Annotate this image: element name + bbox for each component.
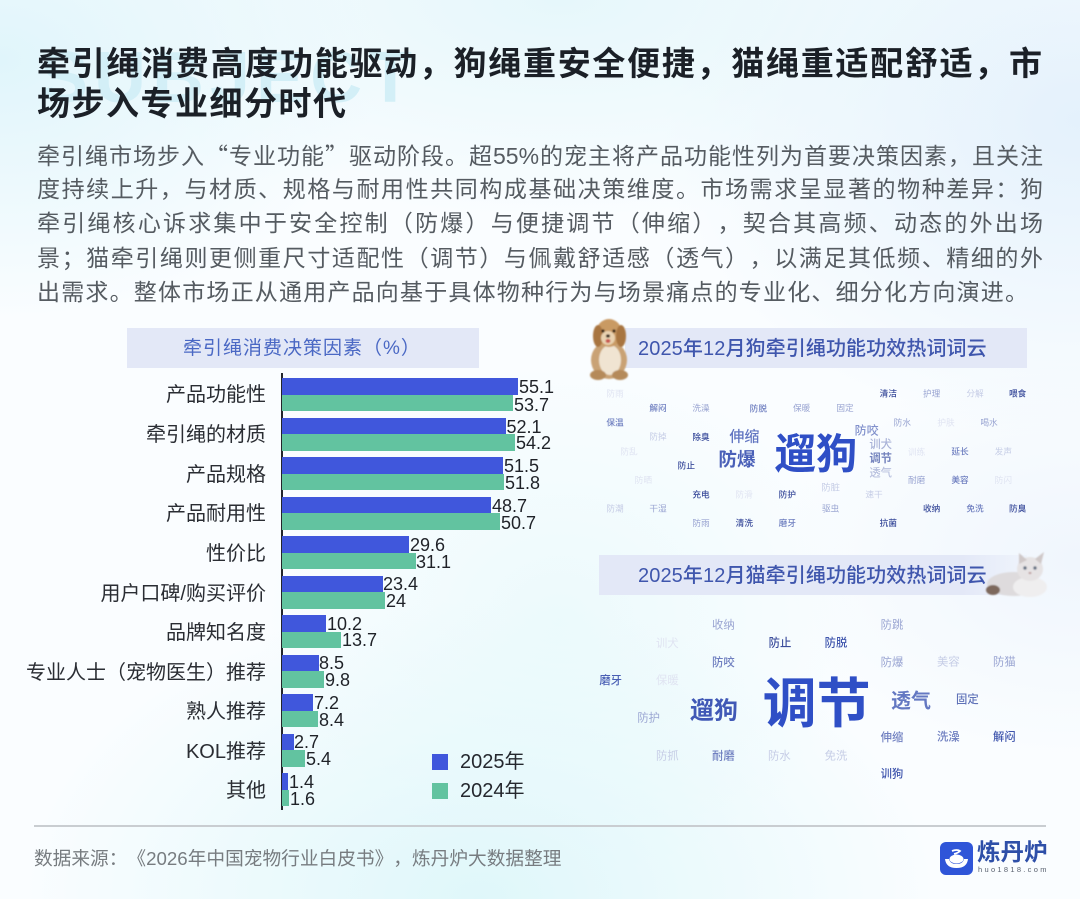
word cloud: dog: 防脱 <box>750 402 767 413</box>
bar chart: 牵引绳的材质 <box>146 424 266 446</box>
word cloud: dog: 速干 <box>865 489 883 499</box>
word cloud: dog: 防止 <box>678 459 695 470</box>
word cloud: dog: 防滑 <box>735 488 753 499</box>
bar chart: 52.1 <box>506 417 542 437</box>
word cloud: dog: 防臭 <box>1009 503 1027 514</box>
word cloud: cat: 训狗 <box>881 768 903 781</box>
title: 牵引绳消费高度功能驱动，狗绳重安全便捷，猫绳重适配舒适，市 <box>37 45 1042 82</box>
bar chart: 29.6 <box>410 535 445 555</box>
word cloud: dog: 固定 <box>836 402 854 413</box>
word cloud: cat: 伸缩 <box>881 730 903 744</box>
word cloud: cat: 保暖 <box>656 673 679 687</box>
word cloud: dog: 防水 <box>894 416 911 427</box>
bar chart: 48.7 <box>492 496 527 516</box>
cat cloud heading: 2025年12月猫牵引绳功能功效热词词云 <box>638 565 987 587</box>
word cloud: cat: 防止 <box>769 636 791 650</box>
legend: 2025年 <box>460 751 524 773</box>
word cloud: dog: 调节 <box>869 451 892 465</box>
icon: dog <box>589 318 629 381</box>
bar chart: 9.8 <box>325 670 350 690</box>
word cloud: cat: 固定 <box>956 692 979 706</box>
word cloud: dog: 洗澡 <box>692 402 710 413</box>
word cloud: cat: 收纳 <box>712 617 735 631</box>
bar chart: 其他 <box>226 780 266 802</box>
word cloud: dog: 充电 <box>692 488 710 499</box>
word cloud: dog: 喝水 <box>980 416 998 427</box>
word cloud: cat: 防护 <box>637 711 660 725</box>
word cloud: dog: 保温 <box>606 416 624 427</box>
word cloud: dog: 免洗 <box>966 503 984 514</box>
bar chart: 51.8 <box>505 473 540 493</box>
watermark: SUBJECT <box>40 38 418 118</box>
word cloud: dog: 喂食 <box>1009 387 1027 398</box>
word cloud: dog: 干湿 <box>649 504 667 514</box>
word cloud: dog: 美容 <box>951 474 969 485</box>
word cloud: cat <box>599 617 1016 781</box>
word cloud: dog: 防护 <box>779 488 796 499</box>
word cloud: cat: 磨牙 <box>599 673 622 687</box>
word cloud: dog: 保暖 <box>793 402 811 413</box>
word cloud: cat: 透气 <box>891 689 931 712</box>
word cloud: dog: 清洗 <box>736 517 753 528</box>
word cloud: dog: 分解 <box>966 387 984 398</box>
bar chart: 品牌知名度 <box>166 622 266 644</box>
logo: huo1818.com <box>978 865 1049 874</box>
word cloud: dog: 防晒 <box>635 474 652 485</box>
word cloud: cat: 免洗 <box>825 749 848 763</box>
bar chart: 13.7 <box>342 630 377 650</box>
word cloud: cat: 解闷 <box>993 730 1016 744</box>
word cloud: cat: 洗澡 <box>937 730 960 744</box>
chart heading <box>127 328 479 368</box>
title <box>37 45 1042 122</box>
word cloud: dog: 透气 <box>869 465 892 479</box>
word cloud: dog: 抗菌 <box>880 517 897 528</box>
bar chart: 产品规格 <box>186 464 266 486</box>
bar chart: 7.2 <box>314 693 339 713</box>
word cloud: dog: 磨牙 <box>779 517 796 528</box>
word cloud: dog: 护理 <box>923 387 941 398</box>
bar chart: 2.7 <box>294 732 319 752</box>
chart heading: 牵引绳消费决策因素（%） <box>183 338 421 359</box>
word cloud: dog: 驱虫 <box>822 503 840 514</box>
word cloud: cat: 防爆 <box>881 655 904 669</box>
word cloud: dog: 防乱 <box>620 445 638 456</box>
word cloud: dog: 防咬 <box>855 422 879 437</box>
word cloud: dog: 耐磨 <box>908 474 926 485</box>
intro paragraph: 出需求。整体市场正从通用产品向基于具体物种行为与场景痛点的专业化、细分化方向演进。 <box>37 279 1029 305</box>
bar chart: 31.1 <box>416 552 451 572</box>
bar chart: 产品功能性 <box>166 384 266 406</box>
word cloud: dog: 防雨 <box>606 387 624 398</box>
word cloud: dog: 防雨 <box>692 517 710 528</box>
word cloud: cat: 防脱 <box>825 636 848 650</box>
bar chart: 5.4 <box>306 749 331 769</box>
bar chart: 54.2 <box>516 433 551 453</box>
bar chart: 53.7 <box>514 395 549 415</box>
word cloud: dog: 解闷 <box>649 402 667 413</box>
word cloud: dog: 防闪 <box>995 474 1012 485</box>
word cloud: cat: 美容 <box>937 655 960 669</box>
word cloud: dog: 训犬 <box>869 437 892 451</box>
bar chart: 51.5 <box>504 456 539 476</box>
word cloud: cat: 训犬 <box>656 636 679 650</box>
bar chart <box>26 373 554 810</box>
word cloud: dog: 伸缩 <box>729 428 759 445</box>
word cloud: cat: 遛狗 <box>690 697 738 724</box>
word cloud: dog: 遛狗 <box>775 431 857 477</box>
dog cloud heading <box>625 328 1027 368</box>
intro paragraph: 景；猫牵引绳则更侧重尺寸适配性（调节）与佩戴舒适感（透气），以满足其低频、精细的外 <box>37 245 1043 271</box>
word cloud: cat: 调节 <box>763 674 871 734</box>
intro paragraph: 牵引绳市场步入“专业功能”驱动阶段。超55%的宠主将产品功能性列为首要决策因素，且关注 <box>37 137 1043 171</box>
bar chart: 23.4 <box>383 574 418 594</box>
bar chart: 10.2 <box>327 614 362 634</box>
word cloud: dog: 收纳 <box>923 503 940 514</box>
word cloud: cat: 防猫 <box>993 655 1016 669</box>
word cloud: cat: 防咬 <box>712 655 735 669</box>
word cloud: dog: 防掉 <box>649 431 667 442</box>
word cloud: dog: 护肤 <box>937 416 955 427</box>
intro paragraph: 牵引绳核心诉求集中于安全控制（防爆）与便捷调节（伸缩），契合其高频、动态的外出场 <box>37 210 1043 236</box>
word cloud: dog: 清洁 <box>880 387 897 398</box>
bar chart: 性价比 <box>206 543 266 565</box>
word cloud: dog: 防潮 <box>606 503 624 514</box>
bar chart: 8.4 <box>319 710 344 730</box>
dog cloud heading: 2025年12月狗牵引绳功能功效热词词云 <box>638 338 987 360</box>
bar chart: 用户口碑/购买评价 <box>100 583 266 605</box>
word cloud: dog: 发声 <box>995 445 1012 456</box>
legend: 2024年 <box>460 780 524 802</box>
word cloud: dog: 训练 <box>908 446 926 457</box>
logo: 炼丹炉 <box>977 839 1048 865</box>
word cloud: cat: 耐磨 <box>712 748 735 762</box>
cat cloud heading <box>599 555 1027 595</box>
source note: 数据来源：《2026年中国宠物行业白皮书》，炼丹炉大数据整理 <box>34 848 561 869</box>
intro paragraph <box>37 137 1043 305</box>
word cloud: dog: 防爆 <box>718 449 756 470</box>
bar chart: KOL推荐 <box>186 741 266 763</box>
word cloud: dog <box>606 387 1027 528</box>
word cloud: cat: 防跳 <box>881 617 903 631</box>
bar chart: 1.6 <box>290 789 315 809</box>
bar chart: 熟人推荐 <box>186 701 266 723</box>
intro paragraph: 度持续上升，与材质、规格与耐用性共同构成基础决策维度。市场需求呈显著的物种差异：狗 <box>37 176 1043 202</box>
word cloud: dog: 延长 <box>951 445 969 456</box>
bar chart: 50.7 <box>501 513 536 533</box>
word cloud: cat: 防抓 <box>656 748 679 762</box>
word cloud: dog: 防脏 <box>821 481 840 492</box>
bar chart: 1.4 <box>289 772 314 792</box>
bar chart: 24 <box>386 591 406 611</box>
logo <box>940 839 1049 875</box>
bar chart: 55.1 <box>519 377 554 397</box>
icon: cat <box>985 552 1047 597</box>
word cloud: dog: 除臭 <box>692 431 710 442</box>
bar chart: 8.5 <box>319 653 344 673</box>
bar chart: 专业人士（宠物医生）推荐 <box>26 662 266 684</box>
title: 场步入专业细分时代 <box>37 85 348 122</box>
legend <box>432 751 524 802</box>
word cloud: cat: 防水 <box>768 748 791 762</box>
bar chart: 产品耐用性 <box>166 503 266 525</box>
